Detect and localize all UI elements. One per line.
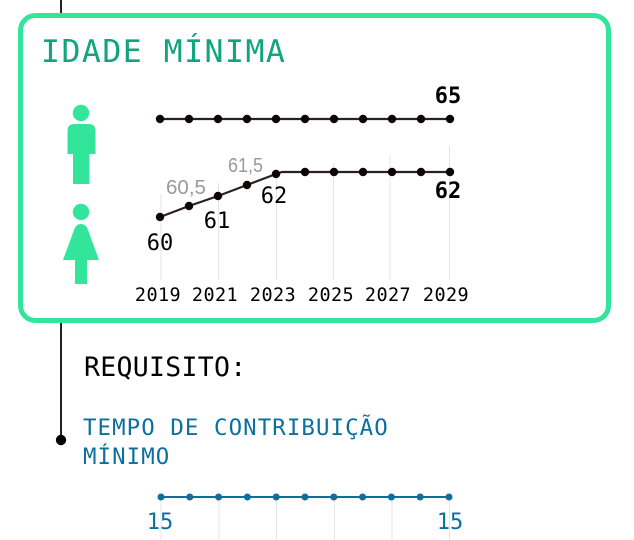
chart grid lines <box>161 146 450 280</box>
value labels: 61 <box>204 209 230 234</box>
value labels: 65 <box>435 84 461 109</box>
year axis labels <box>135 285 469 306</box>
contribution value labels <box>147 510 463 535</box>
line chart: men age <box>156 115 454 123</box>
intermediate value labels: 60,5 <box>166 177 206 199</box>
value labels: 60 <box>147 231 173 256</box>
heading: requisito: REQUISITO: <box>84 352 247 383</box>
value labels: 62 <box>261 184 287 209</box>
timeline dot <box>56 435 66 445</box>
timeline line <box>60 0 62 440</box>
subheading: tempo de contribuição mínimo: MÍNIMO <box>83 442 170 470</box>
panel border <box>20 16 608 320</box>
panel heading: IDADE MÍNIMA <box>41 32 286 70</box>
subheading: tempo de contribuição mínimo: TEMPO DE CONTRIBUIÇÃO <box>83 413 389 441</box>
chart grid lines: contribution <box>161 497 450 540</box>
icon: man <box>68 105 96 184</box>
year axis labels: 2023 <box>250 285 296 306</box>
year axis labels: 2019 <box>135 285 181 306</box>
intermediate value labels: 61,5 <box>228 155 263 177</box>
year axis labels: 2021 <box>192 285 238 306</box>
year axis labels: 2029 <box>423 285 469 306</box>
year axis labels: 2027 <box>365 285 411 306</box>
intermediate value labels <box>166 155 263 199</box>
panel: idade mínima <box>20 16 608 320</box>
line chart: women age <box>156 168 454 221</box>
icon: woman <box>63 204 99 284</box>
value labels: 62 <box>435 179 461 204</box>
contribution value labels: 15 <box>437 510 463 535</box>
year axis labels: 2025 <box>308 285 354 306</box>
line chart: contribution time <box>158 494 452 500</box>
value labels <box>147 84 461 256</box>
contribution value labels: 15 <box>147 510 173 535</box>
